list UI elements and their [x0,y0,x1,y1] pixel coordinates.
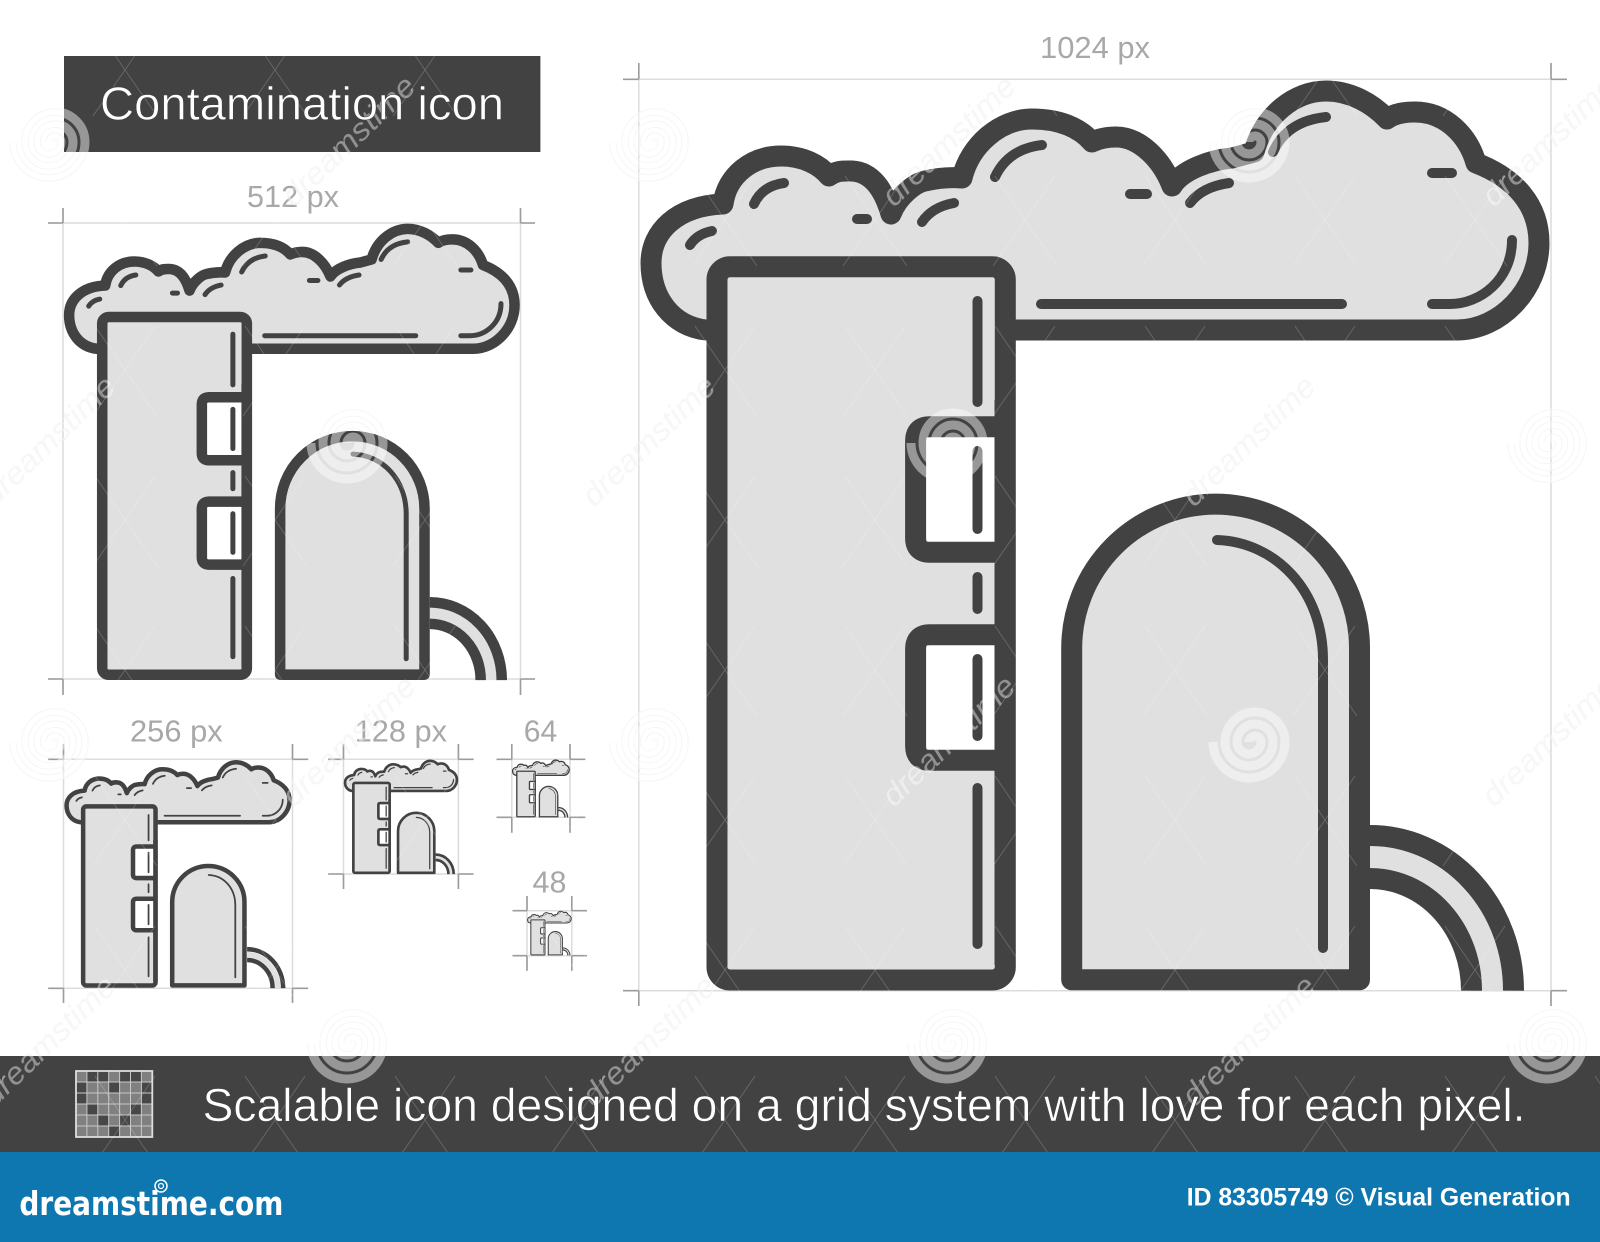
size label: 48: 48 [532,865,566,900]
logo: dreamstime.com: dreamstime.com [19,1184,283,1223]
background watermark wordmarks on white: dreamstime [575,968,723,1113]
overlay watermark wordmarks: dreamstime [875,668,1023,813]
background watermark wordmarks on white: dreamstime [875,668,1023,813]
panel: 48 px icon preview [512,896,587,971]
title: Contamination icon [100,77,504,129]
overlay watermark wordmarks: dreamstime [1175,368,1323,513]
panel: 512 px icon preview [48,208,535,695]
overlay watermark wordmarks: dreamstime [575,968,723,1113]
background watermark wordmarks on white: dreamstime [1175,368,1323,513]
panel: 64 px icon preview [496,744,585,833]
background watermark spiral hollows [13,112,1583,1079]
credit bar background [0,1152,1600,1242]
footer tagline: Scalable icon designed on a grid system with love for each pixel. [202,1079,1526,1131]
size label: 64: 64 [524,714,557,749]
size label: 256 px: 256 px [130,714,223,749]
size label: 512 px: 512 px [247,179,339,214]
footer bar background [0,1056,1600,1152]
background watermark wordmarks on white: dreamstime [1175,968,1323,1113]
overlay watermark wordmarks: dreamstime [1175,968,1323,1113]
background watermark wordmarks on white: dreamstime [575,368,723,513]
panel: 1024 px icon preview [623,63,1567,1006]
overlay watermark wordmarks: dreamstime [275,68,423,213]
overlay watermark spirals [13,112,1583,1079]
overlay watermark wordmarks: dreamstime [575,368,723,513]
title banner background [64,56,540,152]
background watermark wordmarks on white: dreamstime [275,68,423,213]
background watermark wordmarks on white: dreamstime [275,668,423,813]
panel: 128 px icon preview [328,744,474,889]
background watermark wordmarks on white: dreamstime [875,68,1023,213]
panel: 256 px icon preview [48,744,308,1003]
image credit: ID 83305749 © Visual Generation [1187,1183,1571,1211]
size label: 1024 px: 1024 px [1040,30,1150,65]
icon: pixel grid [76,1071,152,1137]
background watermark spirals on white [13,112,1583,1079]
overlay watermark wordmarks: dreamstime [875,68,1023,213]
overlay watermark wordmarks: dreamstime [275,668,423,813]
size label: 128 px: 128 px [355,714,447,749]
